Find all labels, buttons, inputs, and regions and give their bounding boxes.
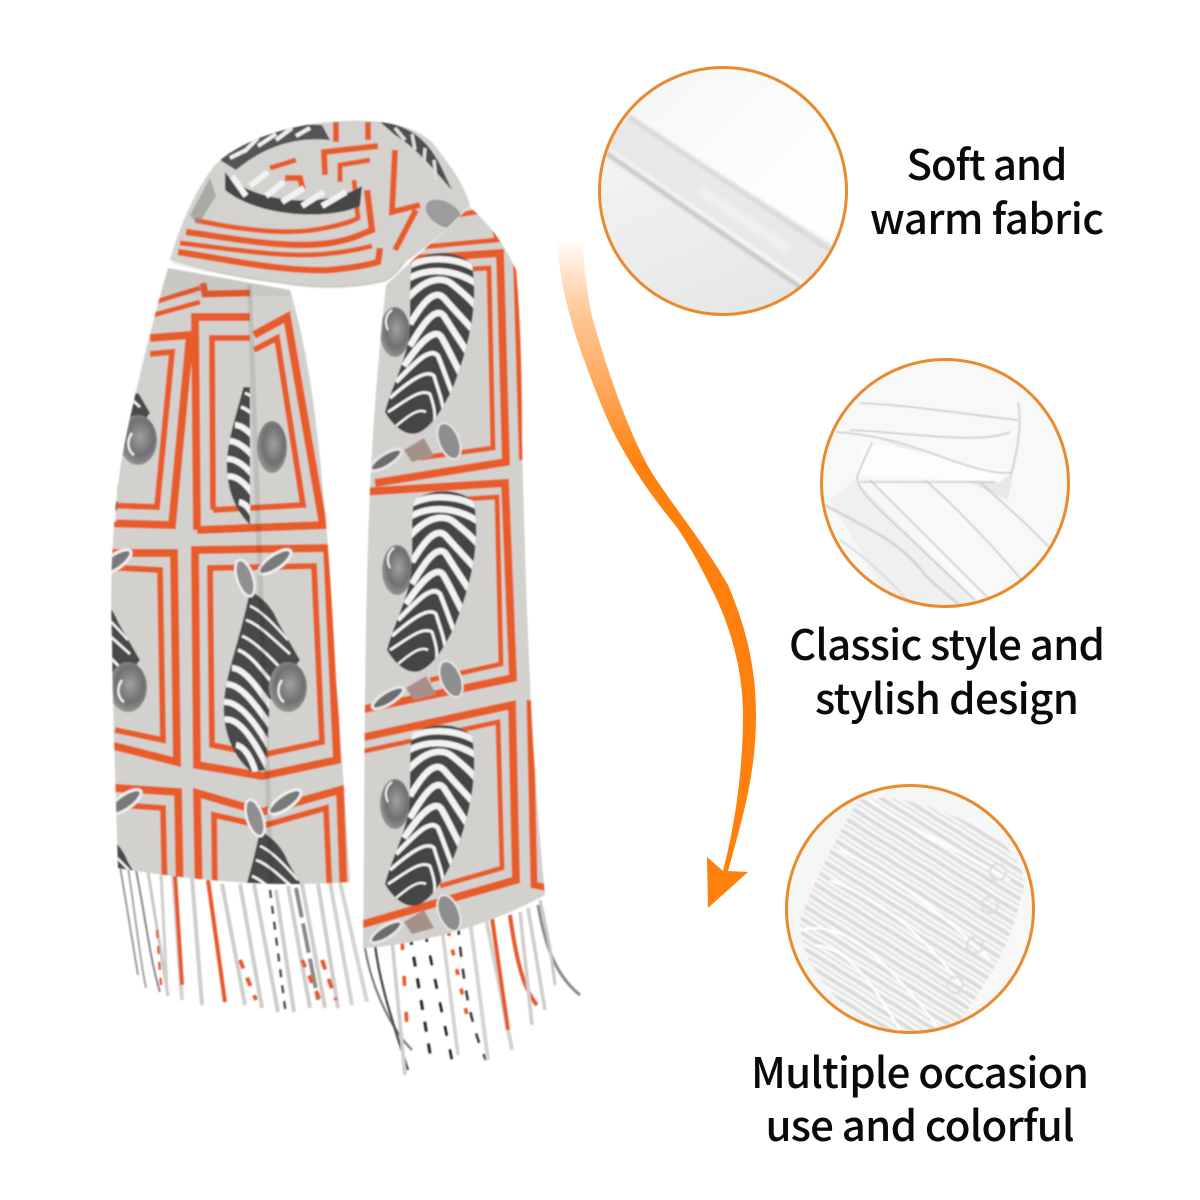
label: classic style [789,612,1105,727]
panel: neck wrap collar [170,120,470,288]
fringe: left scarf end [120,866,367,1015]
upper centre neck [226,386,252,525]
scarf illustration [62,110,580,1075]
upper centre snout [257,421,287,473]
label: multiple occasion [751,1040,1089,1154]
label: multiple occasion: use and colorful [766,1093,1074,1154]
circle outline [600,68,846,314]
panel: fabric detail, classic style [815,355,1075,620]
fabric fold photo [601,110,832,313]
zebra stripes on collar [225,172,362,214]
collar fold shading [172,262,405,287]
arrow [557,240,756,908]
circle outline [822,360,1068,606]
panel: right hanging scarf end [362,207,546,948]
label: multiple occasion: Multiple occasion [751,1040,1089,1101]
zebra motifs, left panel [110,386,334,885]
zebra motifs, right panel [368,253,484,947]
label: soft and warm fabric [870,132,1104,247]
circle outline [786,786,1034,1032]
label: classic style: Classic style and [789,612,1105,673]
orange frames, left panel [100,283,344,900]
tassel photo [788,787,1025,1031]
panel: left hanging scarf end [110,268,350,885]
label: soft and warm fabric: Soft and [906,132,1068,193]
label: soft and warm fabric: warm fabric [870,186,1104,247]
panel: fabric detail, soft and warm [598,66,848,316]
panel: fabric detail, tassels [780,780,1040,1040]
label: classic style: stylish design [815,666,1079,727]
orange lines on collar [178,122,420,270]
orange frames, right panel [360,210,560,925]
fringe: right scarf end [365,900,580,1075]
folded fabric photo [825,400,1050,605]
folds, left panel [247,285,274,890]
